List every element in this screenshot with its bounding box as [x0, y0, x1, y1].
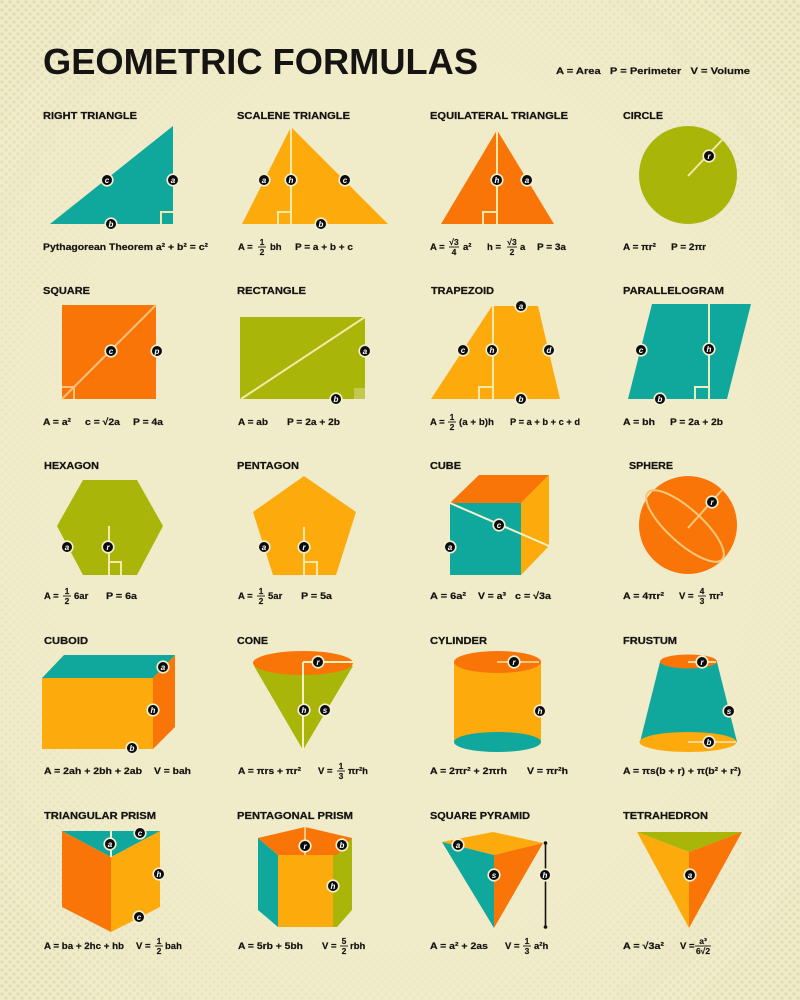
formula: a²h	[534, 941, 548, 952]
markers	[696, 656, 735, 748]
markers: a	[519, 302, 524, 311]
shape	[628, 304, 751, 399]
markers	[330, 345, 371, 405]
markers: p	[154, 347, 160, 356]
formula: c = √2a	[85, 417, 121, 428]
heading: TRAPEZOID	[431, 285, 494, 297]
shape	[240, 317, 365, 399]
formula: a²	[463, 242, 471, 253]
heading: CUBOID	[44, 635, 88, 647]
heading: CONE	[237, 635, 268, 647]
formula: A = ba + 2hc + hb	[44, 941, 124, 952]
formula: P = 3a	[537, 242, 567, 253]
panel: sphere	[623, 460, 737, 606]
markers	[703, 150, 715, 162]
formula	[430, 237, 567, 257]
markers: c	[497, 521, 502, 530]
formula: πr³	[709, 591, 723, 602]
formula: P = 5a	[301, 591, 333, 602]
heading: SPHERE	[629, 460, 673, 472]
panel: tetrahedron	[623, 810, 742, 956]
shape	[242, 127, 388, 224]
markers: h	[289, 176, 294, 185]
panel: equilateral triangle	[430, 110, 568, 257]
shape	[62, 305, 156, 399]
formula: 1	[339, 761, 344, 771]
markers: a	[456, 841, 461, 850]
formula: 1	[450, 412, 455, 422]
panel: parallelogram	[623, 285, 751, 428]
markers	[258, 174, 351, 230]
markers	[452, 839, 551, 881]
panel: trapezoid	[430, 285, 580, 432]
markers	[635, 343, 715, 405]
formula: A = πrs + πr²	[238, 766, 301, 777]
formula: c = √3a	[515, 591, 552, 602]
formula	[44, 936, 182, 956]
panel: pentagon	[237, 460, 356, 606]
markers: b	[519, 395, 524, 404]
formula	[623, 417, 723, 428]
title: GEOMETRIC FORMULAS	[43, 41, 478, 82]
formula: V = bah	[154, 766, 191, 777]
formula: A = bh	[623, 417, 655, 428]
formula: A =	[238, 242, 253, 253]
shape	[50, 126, 173, 224]
markers	[457, 300, 555, 405]
heading: SQUARE PYRAMID	[430, 810, 530, 822]
formula	[238, 936, 366, 956]
shape	[454, 651, 541, 752]
shape	[441, 130, 554, 224]
markers: a	[688, 871, 693, 880]
panel: rectangle	[237, 285, 371, 428]
markers: r	[303, 842, 307, 851]
markers: d	[547, 346, 553, 355]
heading: TRIANGULAR PRISM	[44, 810, 156, 822]
markers: h	[302, 706, 307, 715]
markers: h	[543, 871, 548, 880]
markers	[706, 496, 718, 508]
formula: V =	[679, 591, 694, 602]
markers	[444, 519, 505, 553]
panel: cylinder	[430, 635, 568, 777]
formula	[623, 242, 706, 253]
markers: a	[161, 663, 166, 672]
formula: A = a²	[43, 417, 71, 428]
formula: 2	[510, 247, 515, 257]
formula: 1	[525, 936, 530, 946]
markers: r	[512, 658, 516, 667]
markers: h	[495, 176, 500, 185]
formula: √3	[449, 237, 459, 247]
formula: 6√2	[696, 946, 710, 956]
markers: a	[171, 176, 176, 185]
formula: 3	[339, 771, 344, 781]
markers: s	[492, 871, 497, 880]
panel: right triangle	[43, 110, 208, 253]
markers	[105, 345, 163, 357]
markers: c	[639, 346, 644, 355]
markers: c	[137, 913, 142, 922]
shape	[640, 654, 737, 752]
markers: r	[710, 498, 714, 507]
formula: (a + b)h	[459, 417, 494, 428]
formula	[623, 936, 711, 956]
markers	[299, 839, 348, 892]
markers: b	[340, 841, 345, 850]
markers: b	[334, 395, 339, 404]
markers: s	[323, 706, 328, 715]
markers: a	[262, 543, 267, 552]
formula: A = 2ah + 2bh + 2ab	[44, 766, 142, 777]
formula: √3	[507, 237, 517, 247]
heading: FRUSTUM	[623, 635, 677, 647]
formula: V =	[318, 766, 333, 777]
markers: h	[490, 346, 495, 355]
heading: PENTAGON	[237, 460, 299, 472]
formula: A =	[44, 591, 59, 602]
markers: a	[363, 347, 368, 356]
formula: A = πs(b + r) + π(b² + r²)	[623, 766, 741, 777]
formula: P = 4a	[133, 417, 164, 428]
markers: h	[707, 345, 712, 354]
markers: r	[700, 658, 704, 667]
panel: square pyramid	[430, 810, 551, 956]
markers: h	[331, 882, 336, 891]
markers	[298, 656, 331, 716]
markers	[508, 656, 546, 717]
markers: r	[106, 543, 110, 552]
formula: 2	[259, 596, 264, 606]
formula: 6ar	[74, 591, 89, 602]
formula: P = 2a + 2b	[670, 417, 723, 428]
shape	[42, 655, 175, 749]
formula: A =	[238, 591, 253, 602]
shape	[637, 832, 742, 928]
formula: A =	[430, 417, 445, 428]
markers	[101, 174, 179, 230]
formula: V =	[136, 941, 151, 952]
markers: c	[461, 346, 466, 355]
heading: HEXAGON	[44, 460, 99, 472]
formula: 5ar	[268, 591, 283, 602]
markers: b	[707, 738, 712, 747]
formula: bh	[270, 242, 282, 253]
formula	[430, 766, 568, 777]
shape	[253, 651, 353, 750]
heading: PENTAGONAL PRISM	[237, 810, 353, 822]
formula	[238, 417, 340, 428]
formula: A = 2πr² + 2πrh	[430, 766, 507, 777]
formula: P = a + b + c	[295, 242, 353, 253]
markers: h	[538, 707, 543, 716]
markers: a	[448, 543, 453, 552]
markers: b	[319, 220, 324, 229]
formula	[430, 412, 580, 432]
formula: P = 2πr	[671, 242, 706, 253]
formula	[238, 237, 353, 257]
markers	[491, 174, 533, 186]
formula: A = 4πr²	[623, 591, 664, 602]
shape	[636, 476, 737, 574]
formula: A = 6a²	[430, 591, 466, 602]
shape	[253, 476, 356, 575]
formula: 1	[259, 586, 264, 596]
height line	[544, 841, 547, 929]
formula: Pythagorean Theorem a² + b² = c²	[43, 242, 208, 253]
formula: 2	[450, 422, 455, 432]
markers: c	[109, 347, 114, 356]
formula: 2	[260, 247, 265, 257]
heading: RIGHT TRIANGLE	[43, 110, 137, 122]
panel: hexagon	[44, 460, 163, 606]
formula	[43, 417, 164, 428]
formula: 1	[157, 936, 162, 946]
formula: h =	[487, 242, 501, 253]
formula: rbh	[350, 941, 366, 952]
formula: A = a² + 2as	[430, 941, 488, 952]
markers: r	[707, 152, 711, 161]
markers: h	[151, 706, 156, 715]
formula	[44, 586, 138, 606]
formula: 2	[157, 946, 162, 956]
markers	[258, 541, 310, 553]
shape	[62, 831, 160, 932]
formula: A =	[430, 242, 445, 253]
formula: A = πr²	[623, 242, 656, 253]
formula	[430, 936, 548, 956]
formula	[430, 591, 552, 602]
markers: a	[108, 840, 113, 849]
formula: 3	[525, 946, 530, 956]
formula: bah	[165, 941, 182, 952]
markers: a	[65, 543, 70, 552]
heading: CUBE	[430, 460, 461, 472]
markers: r	[302, 543, 306, 552]
markers: a	[262, 176, 267, 185]
markers: c	[105, 176, 110, 185]
formula: V =	[505, 941, 520, 952]
formula: 2	[342, 946, 347, 956]
legend: A = Area P = Perimeter V = Volume	[556, 66, 750, 77]
markers	[684, 869, 696, 881]
formula: V =	[680, 941, 695, 952]
panel: pentagonal prism	[237, 810, 366, 956]
formula: P = 6a	[106, 591, 138, 602]
shape	[258, 827, 352, 927]
panel: scalene triangle	[237, 110, 388, 257]
formula	[44, 766, 191, 777]
shape	[450, 475, 549, 575]
formula: P = 2a + 2b	[287, 417, 340, 428]
panel: triangular prism	[44, 810, 182, 956]
heading: CIRCLE	[623, 110, 663, 122]
formula: V =	[322, 941, 337, 952]
formula: 1	[260, 237, 265, 247]
markers: b	[109, 220, 114, 229]
heading: PARALLELOGRAM	[623, 285, 724, 297]
heading: SCALENE TRIANGLE	[237, 110, 350, 122]
markers: c	[343, 176, 348, 185]
formula: A = ab	[238, 417, 268, 428]
markers: s	[727, 707, 732, 716]
shape	[639, 126, 737, 224]
panel: cuboid	[42, 635, 191, 777]
markers: r	[316, 658, 320, 667]
formula: 3	[700, 596, 705, 606]
formula	[623, 586, 723, 606]
formula: 4	[452, 247, 457, 257]
panel: frustum	[623, 635, 741, 777]
formula: 4	[700, 586, 705, 596]
heading: RECTANGLE	[237, 285, 306, 297]
heading: EQUILATERAL TRIANGLE	[430, 110, 568, 122]
markers: c	[138, 829, 143, 838]
formula: a³	[699, 936, 707, 946]
formula: 2	[65, 596, 70, 606]
panel: cube	[430, 460, 552, 602]
panel: square	[43, 285, 164, 428]
markers	[104, 827, 165, 923]
formula	[238, 761, 368, 781]
formula: V = a³	[478, 591, 506, 602]
formula: P = a + b + c + d	[510, 417, 580, 428]
panel: cone	[237, 635, 368, 781]
markers: b	[130, 744, 135, 753]
formula: 1	[65, 586, 70, 596]
markers: h	[157, 870, 162, 879]
formula: πr²h	[348, 766, 368, 777]
markers: a	[525, 176, 530, 185]
formula: A = 5rb + 5bh	[238, 941, 303, 952]
formula	[238, 586, 333, 606]
markers: b	[658, 395, 663, 404]
panel: circle	[623, 110, 737, 253]
markers	[126, 661, 169, 754]
formula: 5	[342, 936, 347, 946]
formula: a	[520, 242, 526, 253]
heading: TETRAHEDRON	[623, 810, 708, 822]
heading: CYLINDER	[430, 635, 487, 647]
shape	[442, 832, 543, 928]
shape	[431, 306, 560, 399]
markers	[61, 541, 114, 553]
shape	[57, 480, 163, 575]
formula: V = πr²h	[527, 766, 568, 777]
formula: A = √3a²	[623, 941, 664, 952]
heading: SQUARE	[43, 285, 90, 297]
